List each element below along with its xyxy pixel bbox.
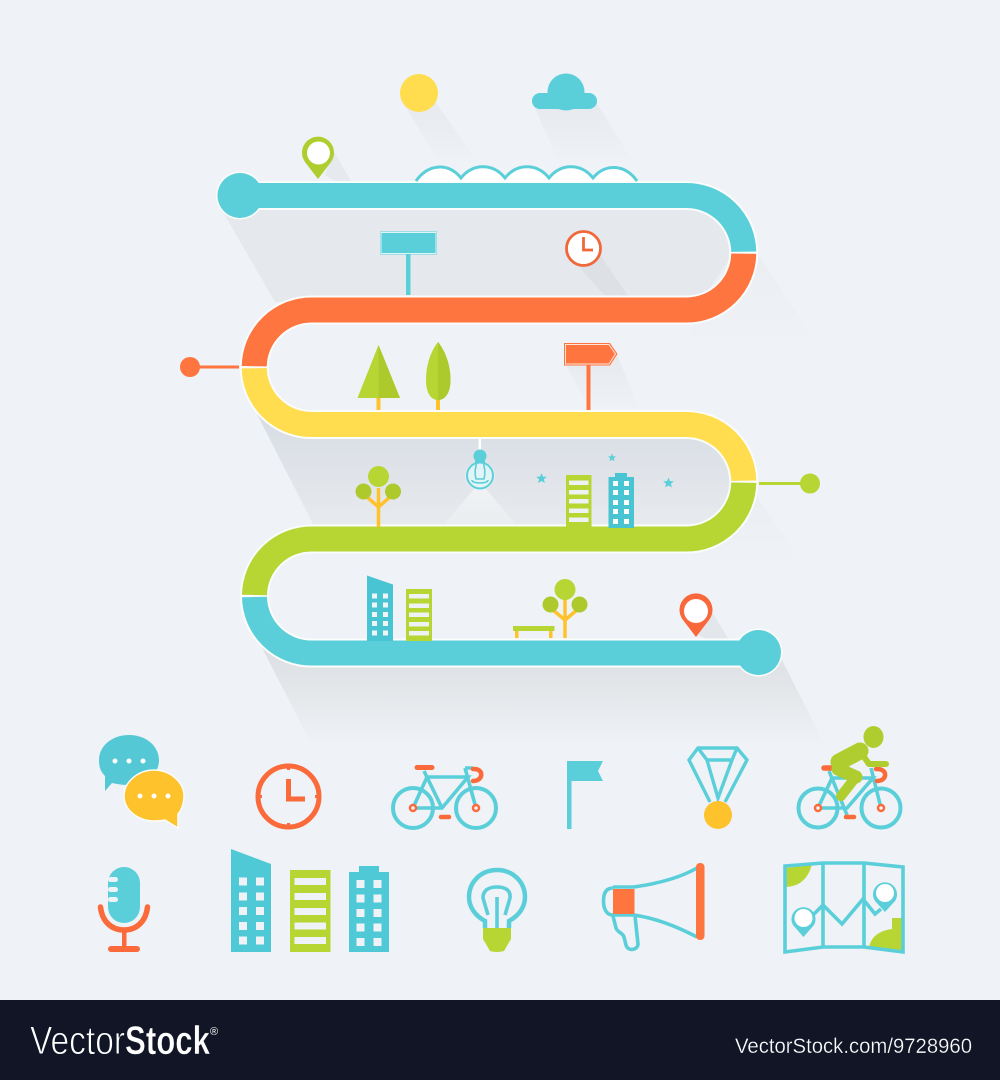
image id text: VectorStock.com/9728960 — [735, 1035, 972, 1058]
icon: sun — [400, 74, 438, 112]
road segment: cyan bottom — [254, 597, 759, 653]
end marker — [725, 628, 782, 676]
logo wordmark: Stock — [125, 1019, 211, 1063]
icon: medal — [689, 748, 747, 829]
icon: pine tree — [358, 345, 400, 410]
icon: bench — [513, 626, 554, 638]
road segment: orange — [254, 254, 744, 366]
stars — [536, 454, 674, 488]
icon: cloud — [532, 74, 597, 110]
icon: bicycle — [393, 768, 496, 828]
scalloped hills on road — [416, 167, 637, 181]
building: slanted tower lower — [367, 576, 393, 641]
road long shadows — [223, 200, 825, 745]
road white outline — [240, 196, 759, 653]
road segment: green — [254, 483, 744, 595]
road — [240, 196, 759, 653]
start marker — [216, 172, 274, 220]
icon: folded map — [785, 863, 903, 952]
logo wordmark: ® — [210, 1026, 218, 1038]
icon: hanging light bulb — [466, 438, 494, 490]
icon: microphone — [100, 867, 148, 952]
icon: round tree above green road — [356, 466, 401, 527]
icon: striped green building — [290, 870, 330, 952]
icon: light bulb — [469, 870, 525, 952]
icon: cyclist — [798, 726, 900, 828]
logo wordmark: Vector — [30, 1019, 125, 1063]
icon: clock — [258, 766, 319, 827]
building: green stripes lower — [406, 589, 432, 641]
icon: green map pin — [302, 137, 334, 179]
sky and small-icon shadows — [325, 100, 730, 642]
icon: flag — [567, 761, 603, 829]
icon: cyan apartment — [349, 866, 389, 952]
icon: orange map pin — [680, 593, 713, 637]
logo wordmark — [30, 1019, 218, 1063]
icon: slanted tower — [231, 849, 271, 952]
road segment: cyan top — [240, 196, 744, 252]
building: cyan upper — [608, 473, 634, 528]
icon: small clock — [566, 232, 600, 266]
icon: orange arrow signpost — [564, 343, 618, 410]
icon: round tree on bottom road — [542, 579, 588, 638]
icon: leaf tree — [426, 342, 450, 410]
connector: green node — [759, 474, 820, 494]
icon: chat bubbles — [99, 735, 184, 828]
icon: cyan billboard — [380, 232, 437, 295]
connector: orange node — [180, 357, 239, 377]
building: green stripes upper — [566, 475, 592, 528]
footer bar — [0, 1000, 1000, 1080]
road segment: yellow — [254, 368, 744, 481]
icon: megaphone — [604, 863, 704, 949]
